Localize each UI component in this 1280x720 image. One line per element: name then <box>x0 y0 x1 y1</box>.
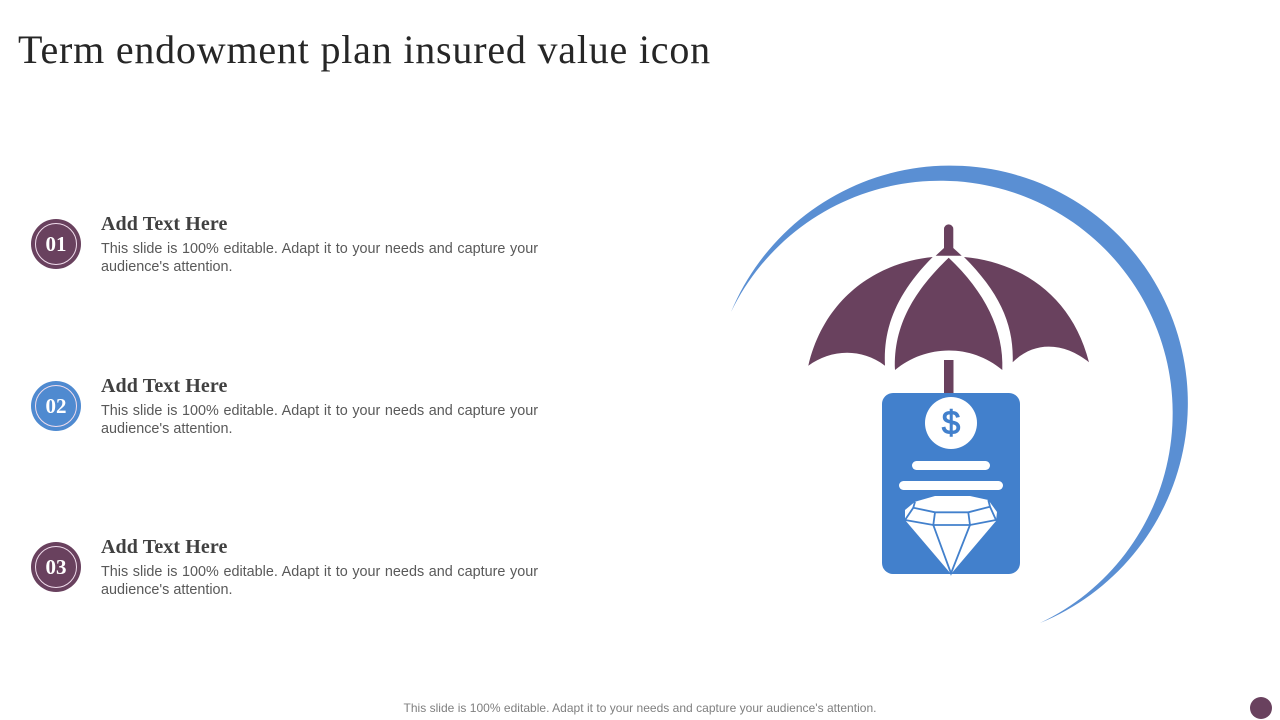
number badge 03: 03 <box>46 555 66 579</box>
text bars <box>899 461 1003 490</box>
list item 3 <box>31 536 538 598</box>
body text 3: This slide is 100% editable. Adapt it to your needs and capture your audience's attention. <box>101 564 538 598</box>
number badge 03 <box>31 542 81 592</box>
body text 1: This slide is 100% editable. Adapt it to your needs and capture your audience's attention. <box>101 241 538 275</box>
icon: umbrella <box>808 224 1089 394</box>
heading 2: Add Text Here <box>101 375 228 397</box>
heading 3: Add Text Here <box>101 536 228 558</box>
number badge 01: 01 <box>46 232 66 256</box>
number badge 02: 02 <box>46 394 66 418</box>
crescent arc <box>731 166 1188 623</box>
icon: dollar coin: $ <box>942 404 960 441</box>
icon: policy card <box>882 393 1020 574</box>
page marker dot <box>1250 697 1272 719</box>
body text 2: This slide is 100% editable. Adapt it to your needs and capture your audience's attention. <box>101 403 538 437</box>
icon: dollar coin <box>925 397 977 449</box>
list item 1 <box>31 213 538 275</box>
number badge 01 <box>31 219 81 269</box>
footer note: This slide is 100% editable. Adapt it to your needs and capture your audience's attention. <box>403 701 877 715</box>
number badge 02 <box>31 381 81 431</box>
title: Term endowment plan insured value icon <box>18 27 711 72</box>
heading 1: Add Text Here <box>101 213 228 235</box>
icon: diamond <box>905 496 997 574</box>
list item 2 <box>31 375 538 437</box>
